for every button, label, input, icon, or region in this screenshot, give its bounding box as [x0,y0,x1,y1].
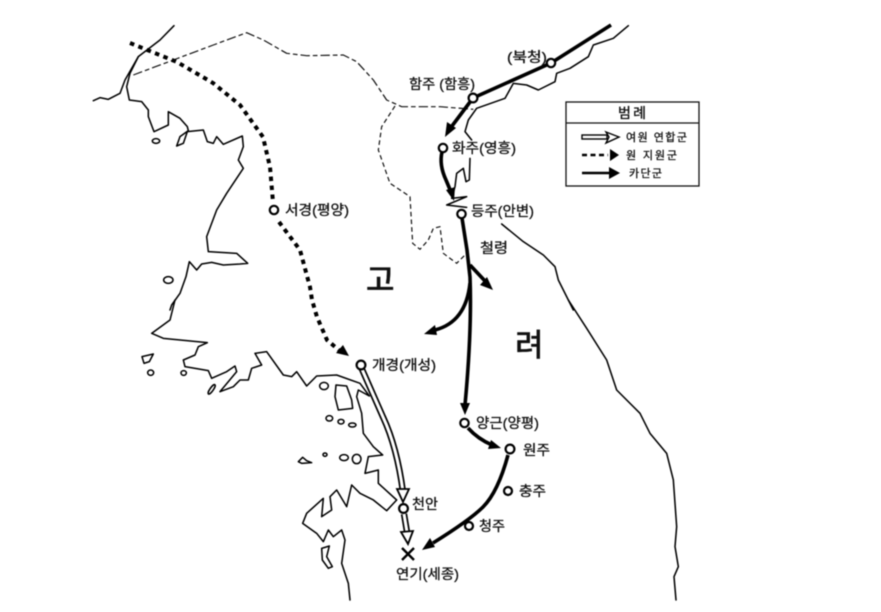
place labels [285,49,550,582]
place labels: 연기(세종) [396,566,459,582]
place labels: 개경(개성) [372,357,436,373]
southwest coastline and islands [142,300,397,600]
place labels: 천안 [412,496,438,512]
legend row: Khitan army: 카단군 [629,167,662,180]
place labels: 양근(양평) [476,415,539,431]
place labels: 화주(영흥) [452,140,516,156]
east coastline [568,300,678,600]
place labels: 서경(평양) [285,202,349,218]
legend row: allied army: 여원 연합군 [626,131,687,144]
place labels: 등주(안변) [471,203,534,219]
place labels: 철령 [480,240,508,256]
route: Yuan reinforcement dotted arrow [130,43,349,356]
region label: 고: 고 [366,263,395,298]
northwest coastline [93,26,248,310]
place labels: 청주 [479,518,505,534]
place labels: (북청) [507,49,547,65]
place labels: 원주 [523,442,550,458]
legend [566,102,699,186]
northeast coastline [447,26,628,310]
route: Goryeo-Yuan allied double arrow [361,367,413,544]
map: coastlines and borders [93,26,678,600]
place labels: 함주 (함흥) [409,76,475,92]
place labels: 충주 [519,483,546,499]
legend title: 범 례 [618,105,646,121]
route: Khitan main arrows [422,25,611,550]
icon: battle cross mark [402,548,414,560]
place markers [270,59,555,530]
region label: 려: 려 [515,328,544,363]
dashed northern border [133,33,473,263]
legend row: Yuan reinforcements: 원 지원군 [626,149,677,162]
